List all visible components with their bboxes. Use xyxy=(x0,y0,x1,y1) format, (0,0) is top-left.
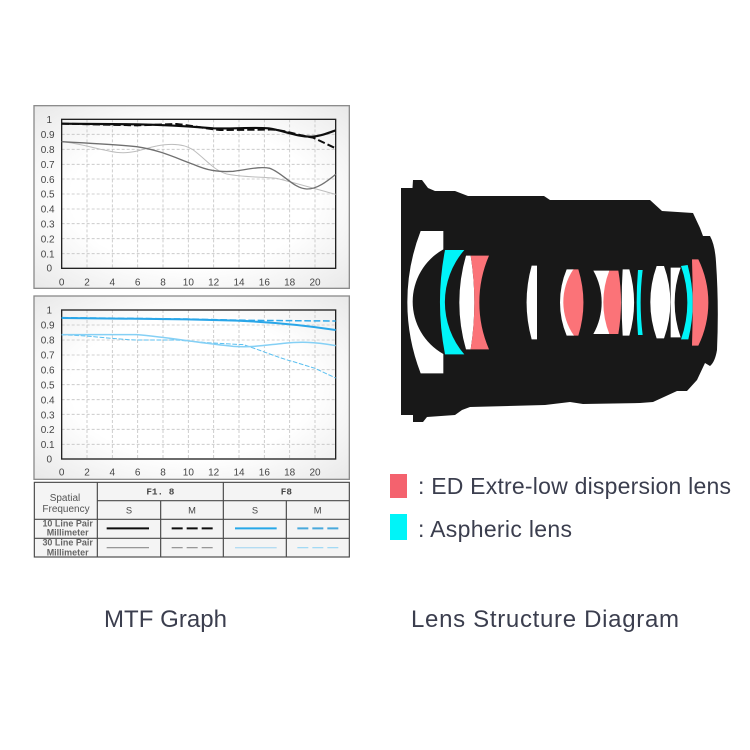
y axis labels: 0.1 xyxy=(41,440,55,451)
x axis labels: 0 xyxy=(59,277,65,288)
lens barrel silhouette xyxy=(401,180,718,422)
y axis labels: 0.8 xyxy=(41,145,55,156)
y axis labels xyxy=(41,115,55,275)
x axis labels: 12 xyxy=(208,468,220,479)
y axis labels: 0.3 xyxy=(41,220,55,231)
lens: white thin element xyxy=(527,266,537,339)
x axis labels: 16 xyxy=(259,468,270,479)
y axis labels: 0.5 xyxy=(41,380,55,391)
lens: white biconvex xyxy=(459,256,474,349)
y axis labels: 1 xyxy=(47,306,53,317)
y axis labels: 0.1 xyxy=(41,249,55,260)
panel: MTF graph F8 xyxy=(34,296,349,479)
x axis labels: 20 xyxy=(309,468,321,479)
y axis labels: 0.9 xyxy=(41,321,55,332)
x axis labels: 18 xyxy=(284,468,296,479)
x axis labels: 14 xyxy=(233,277,245,288)
curve: 30 line pair sagittal F8 xyxy=(62,335,336,347)
column headings xyxy=(126,486,322,515)
y axis labels: 1 xyxy=(47,115,53,126)
curve: 10 line pair meridional F8 xyxy=(62,318,336,321)
lens: white plano-concave xyxy=(671,268,681,337)
x axis labels: 10 xyxy=(183,277,194,288)
column headings: S xyxy=(252,505,258,515)
legend: aspheric lens: : Aspheric lens xyxy=(418,516,572,542)
x axis labels xyxy=(59,468,321,479)
y axis labels: 0.4 xyxy=(41,395,55,406)
curve: 30 line pair meridional F1.8 xyxy=(62,142,336,194)
column headings: M xyxy=(314,505,322,515)
x axis labels: 6 xyxy=(135,277,141,288)
y axis labels: 0.9 xyxy=(41,130,55,141)
x axis labels: 10 xyxy=(183,468,194,479)
x axis labels: 6 xyxy=(135,468,141,479)
x axis labels: 8 xyxy=(160,277,166,288)
x axis labels xyxy=(59,277,321,288)
row heading: spatial frequency: Frequency xyxy=(42,504,90,515)
lens structure diagram xyxy=(401,180,718,422)
row headings: line pairs: 10 Line Pair xyxy=(42,519,93,529)
legend table: spatial frequency xyxy=(34,482,349,557)
x axis labels: 18 xyxy=(284,277,296,288)
y axis labels: 0 xyxy=(47,264,53,275)
lens: ED rear xyxy=(692,259,708,346)
row headings: line pairs xyxy=(42,519,93,557)
x axis labels: 4 xyxy=(110,277,116,288)
lens: ED element 2 xyxy=(603,271,621,334)
y axis labels: 0.2 xyxy=(41,234,55,245)
x axis labels: 12 xyxy=(208,277,220,288)
front lens group xyxy=(407,231,537,373)
curve: 10 line pair sagittal F8 xyxy=(62,318,336,330)
curve: 10 line pair sagittal F1.8 xyxy=(62,124,336,137)
row heading: spatial frequency: Spatial xyxy=(50,493,80,504)
row headings: line pairs: Millimeter xyxy=(47,547,89,557)
lens: white meniscus xyxy=(560,269,574,336)
y axis labels: 0.7 xyxy=(41,351,55,362)
column headings: S xyxy=(126,505,132,515)
y axis labels: 0.7 xyxy=(41,160,55,171)
row headings: line pairs: Millimeter xyxy=(47,528,89,538)
lens: aspheric front xyxy=(440,250,464,354)
lens: aspheric thin xyxy=(637,270,643,335)
curve: 10 line pair meridional F1.8 xyxy=(62,124,336,148)
y axis labels: 0.6 xyxy=(41,175,55,186)
x axis labels: 20 xyxy=(309,277,321,288)
lens: ED doublet element xyxy=(471,256,489,349)
y axis labels: 0.4 xyxy=(41,205,55,216)
lens: aspheric rear xyxy=(681,265,693,339)
lens: white concave xyxy=(593,271,609,334)
y axis labels: 0.6 xyxy=(41,366,55,377)
y axis labels xyxy=(41,306,55,465)
lens: white element xyxy=(622,269,634,336)
caption: MTF Graph: MTF Graph xyxy=(104,606,227,633)
column headings: F1. 8 xyxy=(146,486,175,497)
panel: MTF graph F1.8 xyxy=(34,106,349,288)
y axis labels: 0.2 xyxy=(41,425,55,436)
x axis labels: 8 xyxy=(160,468,166,479)
x axis labels: 0 xyxy=(59,468,65,479)
lens: white biconvex xyxy=(650,266,670,338)
curve: 30 line pair sagittal F1.8 xyxy=(62,142,336,189)
curve: 30 line pair meridional F8 xyxy=(62,335,336,378)
y axis labels: 0.5 xyxy=(41,190,55,201)
x axis labels: 16 xyxy=(259,277,270,288)
column headings: F8 xyxy=(281,486,292,497)
legend: ED lens: : ED Extre-low dispersion lens xyxy=(418,473,731,499)
caption: Lens Structure Diagram: Lens Structure Diagram xyxy=(411,606,679,633)
x axis labels: 2 xyxy=(84,277,90,288)
x axis labels: 2 xyxy=(84,468,90,479)
x axis labels: 4 xyxy=(110,468,116,479)
x axis labels: 14 xyxy=(233,468,245,479)
y axis labels: 0.3 xyxy=(41,410,55,421)
row heading: spatial frequency xyxy=(42,493,90,515)
row headings: line pairs: 30 Line Pair xyxy=(42,537,93,547)
y axis labels: 0 xyxy=(47,454,53,465)
rear lens group xyxy=(560,259,708,346)
lens: ED element 1 xyxy=(563,269,583,336)
lens: front white meniscus xyxy=(407,231,443,373)
y axis labels: 0.8 xyxy=(41,336,55,347)
column headings: M xyxy=(188,505,196,515)
line samples xyxy=(107,528,338,548)
